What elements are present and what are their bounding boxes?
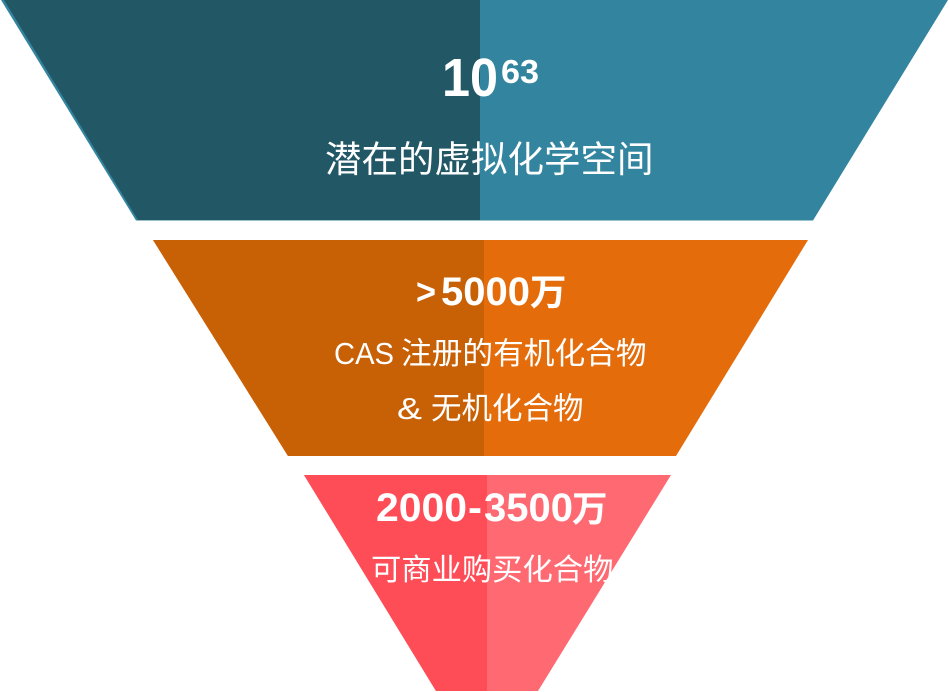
heading: 20 to 35 million: - bbox=[468, 486, 482, 530]
heading: 20 to 35 million bbox=[376, 486, 608, 530]
heading: more than 50 million: 5000 bbox=[441, 270, 530, 314]
label: virtual chemical space: 潜在的虚拟化学空间 bbox=[325, 139, 654, 180]
tier 2 left dark segment bbox=[153, 240, 484, 456]
tier 3 right light segment bbox=[304, 475, 671, 691]
label: and inorganic compounds: & bbox=[397, 391, 422, 426]
heading: 20 to 35 million: 万 bbox=[572, 489, 608, 529]
tier 1 right light segment bbox=[1, 0, 948, 220]
tier 1 left dark segment bbox=[4, 0, 480, 220]
heading: more than 50 million bbox=[416, 270, 566, 314]
label: CAS registered organic compounds: CAS bbox=[334, 336, 394, 371]
heading: more than 50 million: 万 bbox=[530, 272, 566, 313]
label: and inorganic compounds: 无机化合物 bbox=[431, 392, 584, 426]
panel: CAS registered compounds tier bbox=[153, 240, 808, 456]
heading: 10^63: 63 bbox=[501, 53, 539, 90]
tier 2 right light segment bbox=[153, 240, 808, 456]
heading: 20 to 35 million: 3500 bbox=[484, 486, 573, 530]
panel: virtual chemical space tier bbox=[1, 0, 948, 220]
heading: more than 50 million: > bbox=[416, 271, 436, 312]
tier 3 left dark segment bbox=[304, 475, 487, 691]
heading: 20 to 35 million: 2000 bbox=[376, 486, 467, 530]
heading: 10^63: 10 bbox=[442, 48, 498, 108]
label: CAS registered organic compounds: 注册的有机化合物 bbox=[401, 336, 647, 371]
panel: commercially available compounds tier bbox=[304, 475, 671, 691]
label: commercially available compounds: 可商业购买化合物 bbox=[371, 553, 613, 587]
heading: 10^63 bbox=[442, 48, 539, 108]
